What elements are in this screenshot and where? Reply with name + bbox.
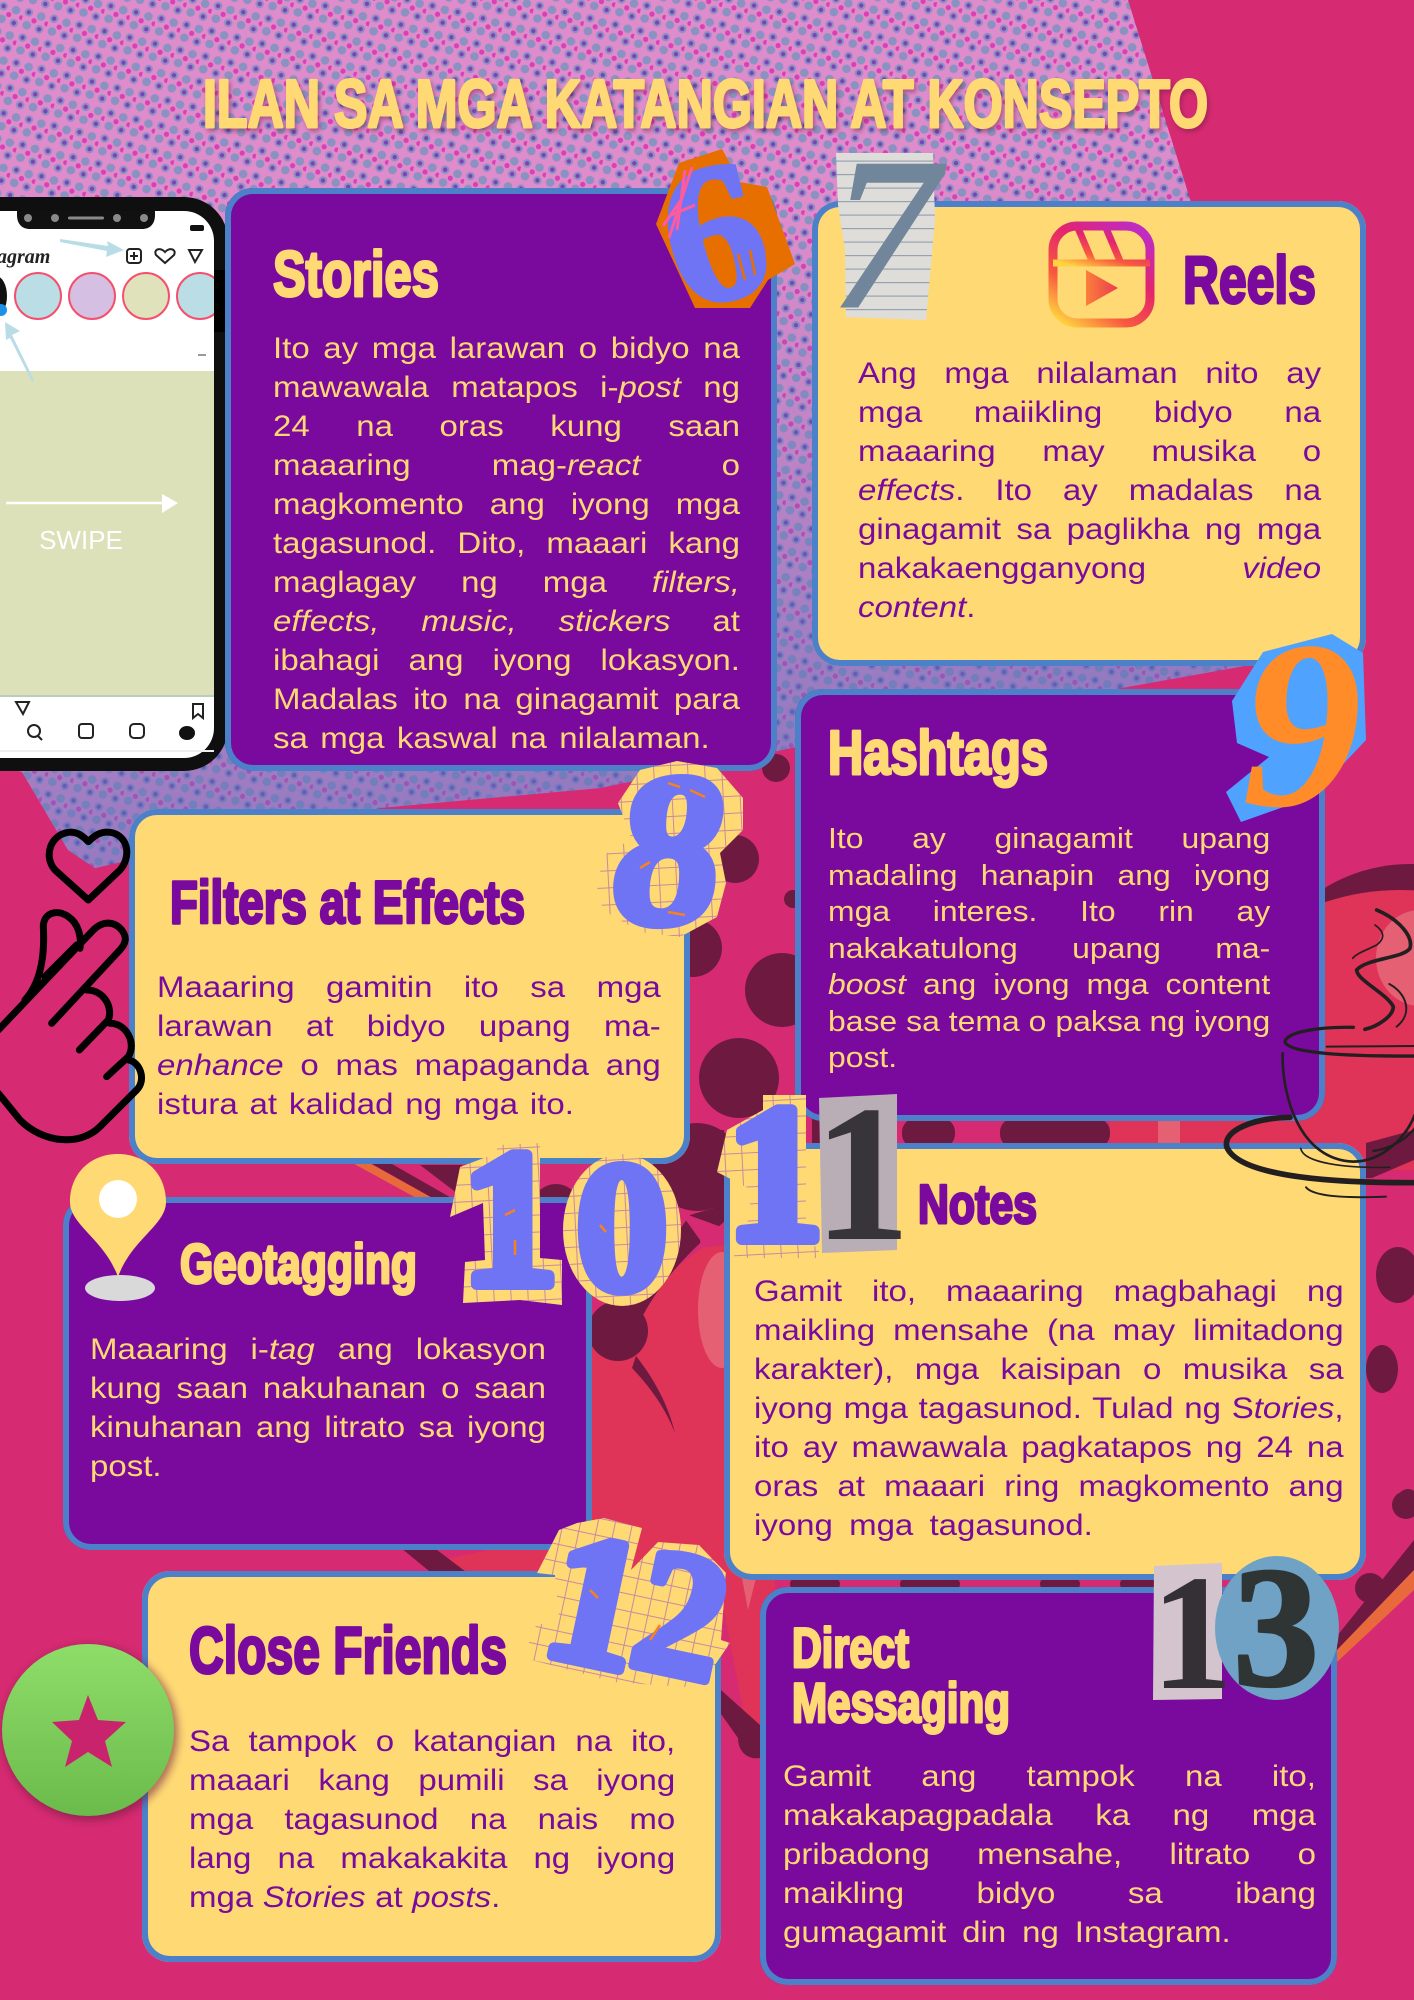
text: Filters description: larawan at bidyo upang ma-	[157, 1010, 661, 1043]
heading: Hashtags: Hashtags	[828, 719, 1048, 788]
text: Notes description: iyong mga tagasunod.	[754, 1509, 1093, 1542]
heading: Stories: Stories	[273, 238, 439, 310]
text: Stories description: ibahagi ang iyong lokasyon.	[273, 644, 740, 677]
text: Hashtags description: base sa tema o paksa ng iyong	[828, 1006, 1270, 1038]
text: Filters description	[157, 971, 661, 1121]
text: Close Friends description: Sa tampok o katangian na ito,	[189, 1725, 675, 1758]
text: Stories description: mawawala matapos i-post ng	[273, 371, 740, 404]
number 13: 3	[1233, 1533, 1319, 1723]
heading: Reels: Reels	[1183, 243, 1316, 318]
panel: Notes	[724, 1143, 1366, 1580]
heading: Close Friends: Close Friends	[189, 1613, 507, 1687]
text: Close Friends description: mga tagasunod na nais mo	[189, 1803, 675, 1836]
text: Hashtags description: post.	[828, 1042, 897, 1074]
phone mockup	[0, 197, 225, 771]
text: Stories description: maglagay ng mga filters,	[273, 566, 740, 599]
text: Notes description	[754, 1275, 1344, 1542]
number 12	[527, 1492, 746, 1720]
text: Notes description: Gamit ito, maaaring magbahagi ng	[754, 1275, 1344, 1308]
text: Hashtags description	[828, 823, 1270, 1074]
number 13	[1151, 1533, 1339, 1724]
text: Stories description: sa mga kaswal na nilalaman.	[273, 722, 710, 755]
text: Stories description: 24 na oras kung saan	[273, 410, 740, 443]
panel: Filters at Effects	[129, 809, 690, 1164]
text: Notes description: maikling mensahe (na may limitadong	[754, 1314, 1344, 1347]
text: Direct Messaging description	[783, 1760, 1316, 1949]
text: Direct Messaging description: gumagamit din ng Instagram.	[783, 1916, 1231, 1949]
text: Stories description: tagasunod. Dito, maaari kang	[273, 527, 740, 560]
text: Direct Messaging description: pribadong mensahe, litrato o	[783, 1838, 1316, 1871]
dark dots and stripes	[365, 754, 1414, 1758]
text: Close Friends description: lang na makakakita ng iyong	[189, 1842, 675, 1875]
text: Reels description: maaaring may musika o	[858, 435, 1321, 468]
text: Geotagging description: Maaaring i-tag ang lokasyon	[90, 1333, 546, 1366]
heading: Filters at Effects: Filters at Effects	[170, 869, 525, 936]
text: Reels description	[858, 357, 1322, 624]
text: Reels description: ginagamit sa paglikha ng mga	[858, 513, 1321, 546]
red centre and cup blobs	[440, 864, 1414, 1760]
icon: location pin	[70, 1154, 166, 1301]
text: Hashtags description: nakakatulong upang ma-	[828, 932, 1270, 964]
number 10: 0	[576, 1125, 668, 1330]
text: Geotagging description: kinuhanan ang litrato sa iyong	[90, 1411, 546, 1444]
text: Stories description: effects, music, stickers at	[273, 605, 740, 638]
heading: Direct Messaging: Messaging	[792, 1671, 1010, 1734]
text: Reels description: nakakaengganyong video	[858, 552, 1321, 585]
text: Geotagging description: kung saan nakuhanan o saan	[90, 1372, 546, 1405]
panel: Stories	[225, 188, 777, 771]
phone mockup: SWIPE	[39, 525, 123, 555]
text: Filters description: enhance o mas mapaganda ang	[157, 1049, 661, 1082]
number 7: 7	[830, 114, 945, 353]
text: Close Friends description: maaari kang pumili sa iyong	[189, 1764, 675, 1797]
text: Direct Messaging description: maikling bidyo sa ibang	[783, 1877, 1316, 1910]
number 6: 6	[639, 115, 788, 352]
icon: coffee cup	[1226, 910, 1414, 1197]
panel: Close Friends	[142, 1571, 721, 1962]
panel: Geotagging	[63, 1197, 592, 1550]
text: Filters description: istura at kalidad ng mga ito.	[157, 1088, 574, 1121]
icon: reels clapper	[1053, 226, 1150, 323]
number 8: 8	[614, 730, 722, 969]
text: Close Friends description: mga Stories at posts.	[189, 1881, 500, 1914]
number 11: 1	[813, 1066, 911, 1282]
icon: finger heart hand	[0, 832, 142, 1140]
number 11: 1	[726, 1066, 824, 1282]
text: Notes description: iyong mga tagasunod. Tulad ng Stories,	[754, 1392, 1344, 1425]
text: Stories description: Ito ay mga larawan o bidyo na	[273, 332, 740, 365]
panel: Direct Messaging	[760, 1587, 1337, 1985]
text: Geotagging description	[90, 1333, 546, 1483]
text: Stories description: Madalas ito na ginagamit para	[273, 683, 740, 716]
number 11	[717, 1066, 911, 1282]
number 12: 1	[529, 1492, 662, 1712]
heading: Direct Messaging: Direct	[792, 1616, 909, 1679]
text: Reels description: Ang mga nilalaman nito ay	[858, 357, 1321, 390]
panel: Hashtags	[795, 689, 1325, 1121]
text: Geotagging description: post.	[90, 1450, 162, 1483]
number 9: 9	[1242, 591, 1362, 857]
text: Reels description: content.	[858, 591, 975, 624]
text: Direct Messaging description: Gamit ang tampok na ito,	[783, 1760, 1316, 1793]
text: Notes description: ito ay mawawala pagkatapos ng 24 na	[754, 1431, 1344, 1464]
number 13: 1	[1151, 1541, 1233, 1724]
heading: Direct Messaging	[792, 1616, 1010, 1735]
text: Reels description: effects. Ito ay madalas na	[858, 474, 1321, 507]
text: Filters description: Maaaring gamitin ito sa mga	[157, 971, 661, 1004]
icon: green star badge	[2, 1644, 178, 1821]
halftone patch	[0, 0, 1290, 868]
text: Notes description: oras at maaari ring magkomento ang	[754, 1470, 1344, 1503]
text: Notes description: karakter), mga kaisipan o musika sa	[754, 1353, 1344, 1386]
text: Hashtags description: madaling hanapin ang iyong	[828, 860, 1270, 892]
text: Reels description: mga maiikling bidyo na	[858, 396, 1321, 429]
heading: Notes: Notes	[918, 1173, 1037, 1235]
number 10: 1	[461, 1111, 559, 1327]
text: Hashtags description: boost ang iyong mga content	[828, 969, 1270, 1001]
number 10	[450, 1111, 681, 1330]
text: Direct Messaging description: makakapagpadala ka ng mga	[783, 1799, 1316, 1832]
heading: Geotagging: Geotagging	[180, 1232, 417, 1295]
number 12: 2	[617, 1508, 746, 1720]
text: Close Friends description	[189, 1725, 675, 1914]
text: Stories description	[273, 332, 740, 755]
panel: Reels	[812, 201, 1366, 666]
text: Hashtags description: mga interes. Ito rin ay	[828, 896, 1270, 928]
text: Stories description: magkomento ang iyong mga	[273, 488, 740, 521]
text: Stories description: maaaring mag-react o	[273, 449, 740, 482]
text: Hashtags description: Ito ay ginagamit upang	[828, 823, 1270, 855]
